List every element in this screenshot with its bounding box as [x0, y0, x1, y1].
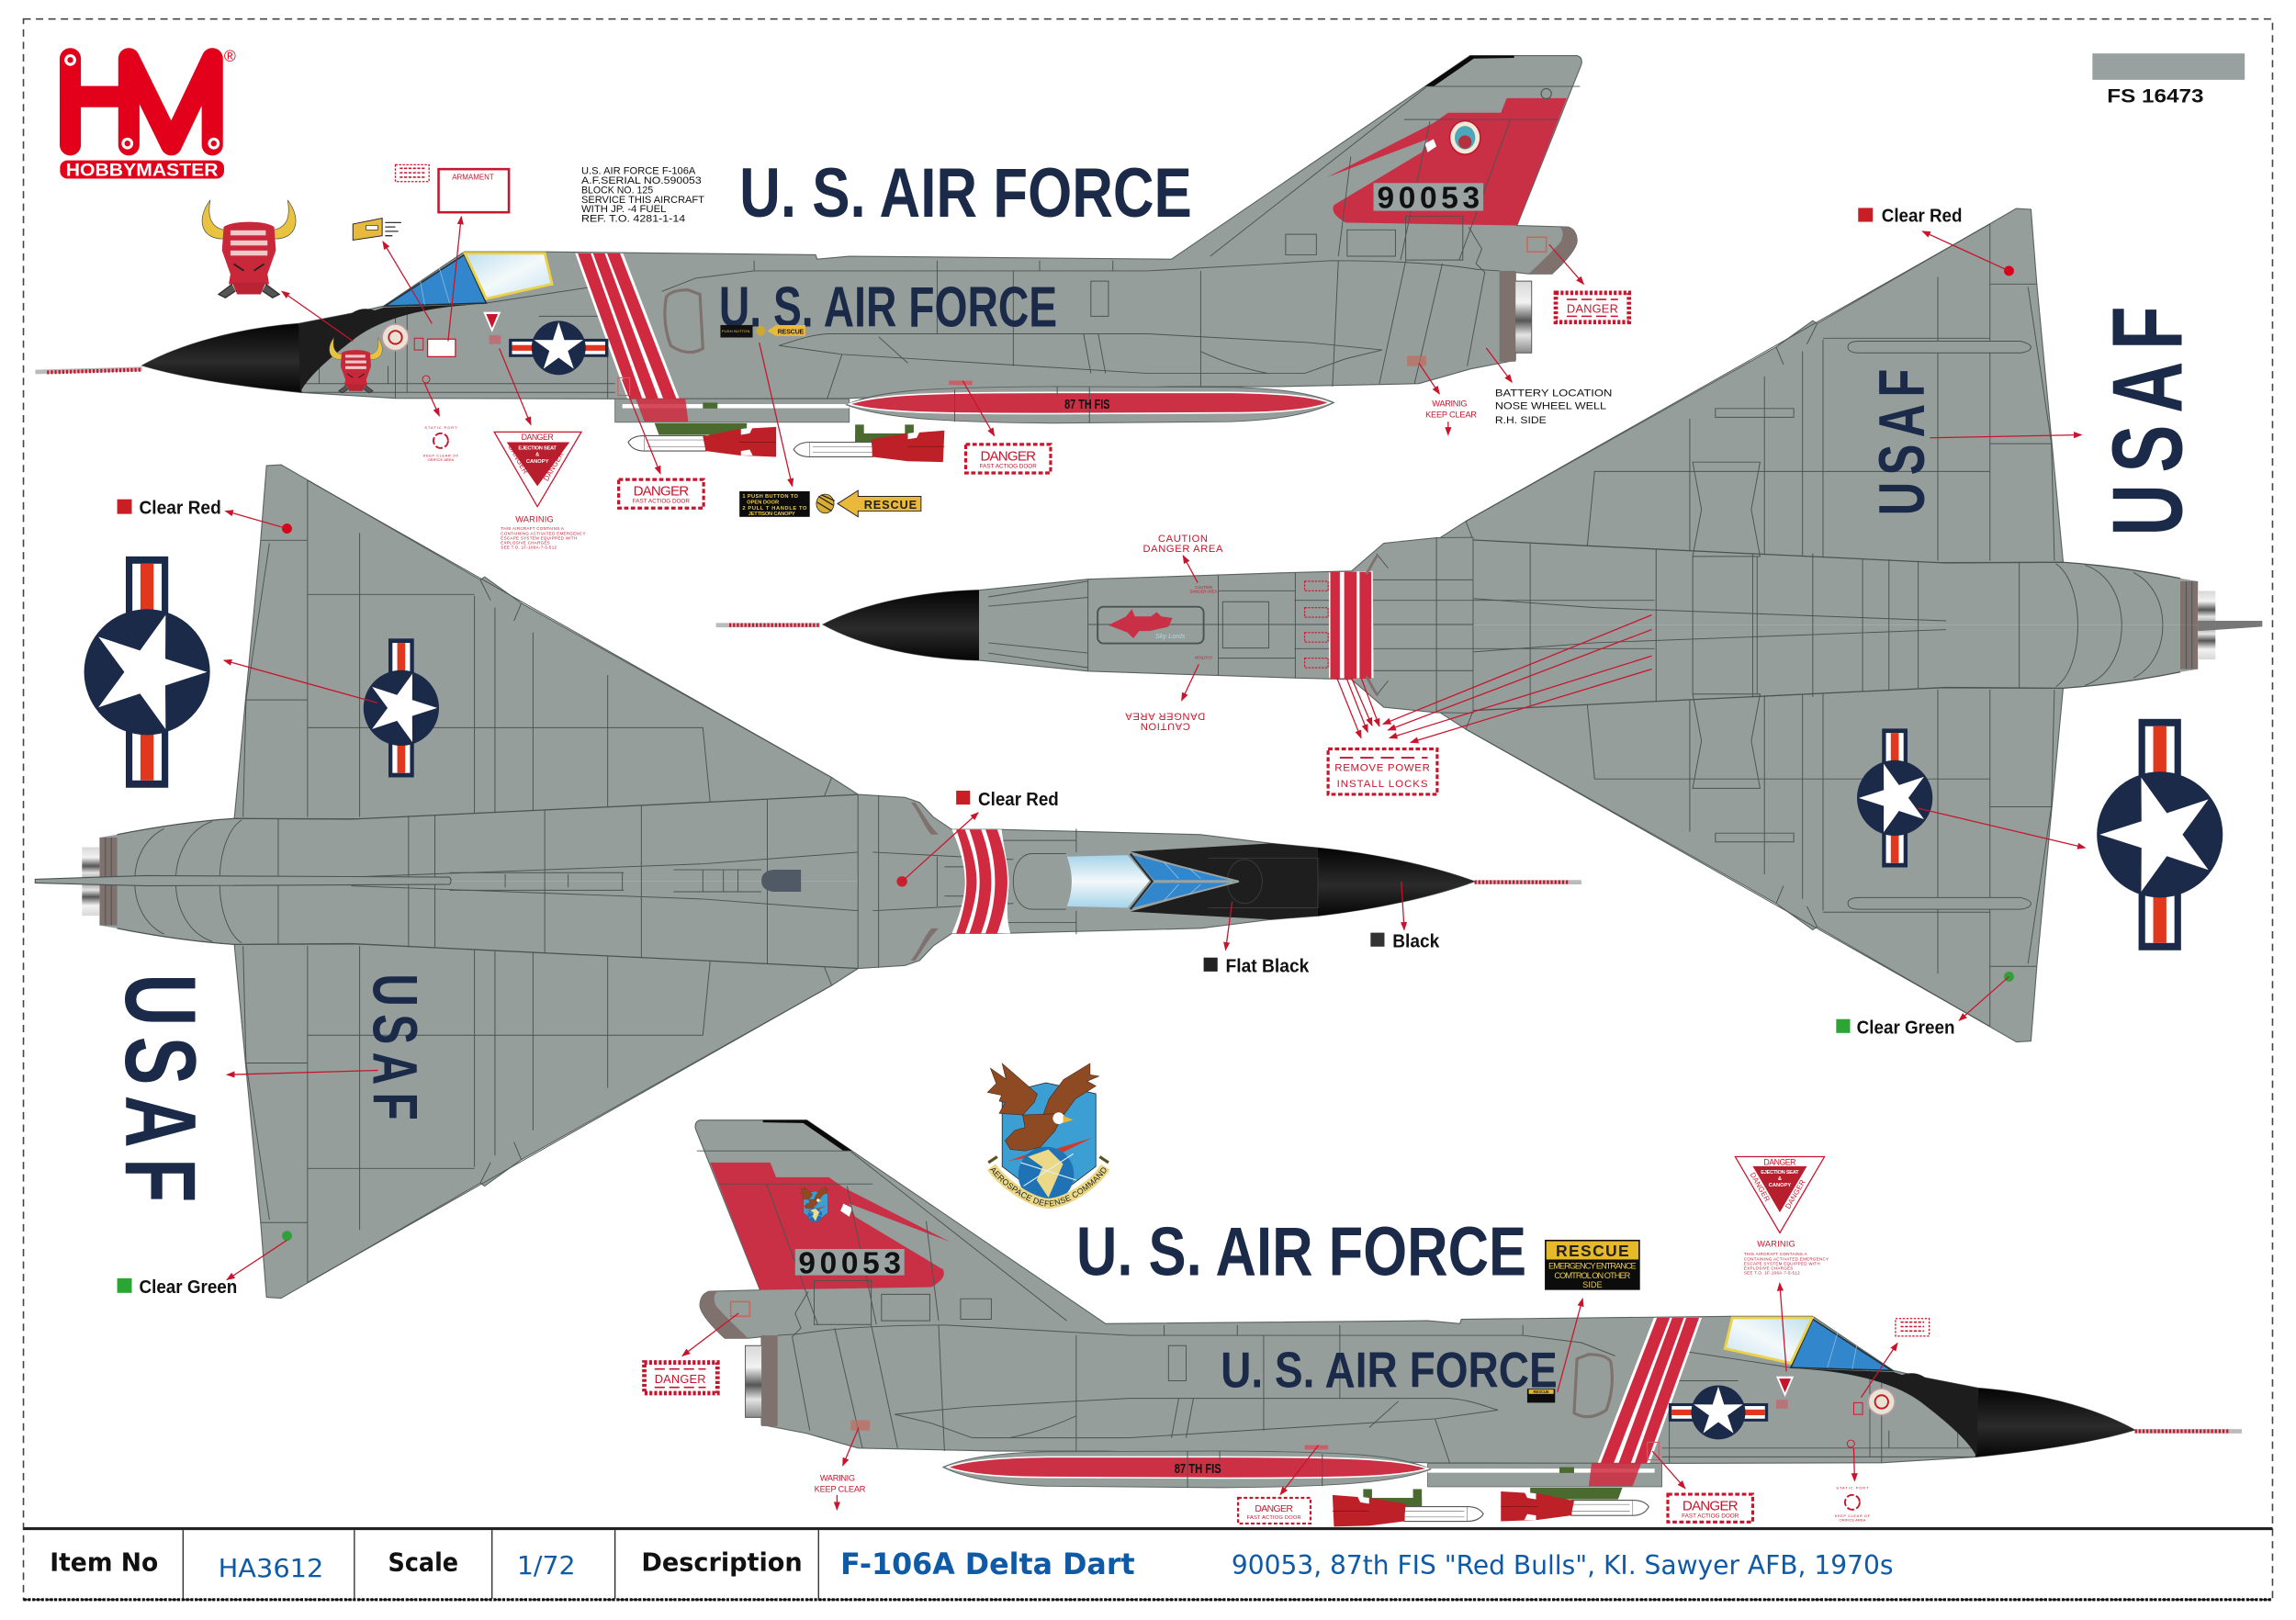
underside view: forward fuselage: Sky Lords [1155, 632, 1186, 640]
legend: clear red mid: Clear Red [978, 790, 1059, 810]
aircraft data block: U.S. AIR FORCE F-106A [581, 166, 696, 177]
underside view leader arrows [1182, 231, 2085, 1020]
danger triangle decal: DANGER [1784, 1178, 1807, 1210]
stencil decal [1896, 1319, 1930, 1336]
canopy jettison panel: 1 PUSH BUTTON TO [742, 494, 798, 500]
fuselage title: U. S. AIR FORCE [1221, 1342, 1558, 1399]
warning keep clear: WARINIG [1432, 399, 1468, 408]
danger fast action door decal 1 [619, 479, 703, 508]
small rescue decal: RESCUE [1533, 1389, 1549, 1394]
rescue panel [1545, 1240, 1640, 1290]
underside roundel small [1857, 728, 1932, 867]
aircraft data block: BLOCK NO. 125 [581, 185, 653, 196]
yellow card decal [353, 219, 401, 240]
rescue arrow decal [838, 490, 921, 517]
small bull emblem [330, 338, 382, 393]
warning fine print: THIS AIRCRAFT CONTAINS A [1744, 1252, 1807, 1256]
bottom aircraft: right side profile [695, 1120, 2135, 1526]
danger triangle decal: DANGER [522, 433, 554, 442]
small armament panel [428, 339, 456, 356]
ADC crest [986, 1063, 1109, 1209]
legend: clear red (underside): Clear Red [1882, 207, 1962, 227]
down arrow [836, 1495, 838, 1510]
underside green light [2004, 972, 2014, 982]
danger triangle decal: DANGER [1763, 1157, 1796, 1166]
nose probe bottom aircraft [2135, 1429, 2242, 1434]
label: scale: Scale [388, 1547, 458, 1578]
danger triangle decal: DANGER [507, 444, 530, 476]
fuselage title: U. S. AIR FORCE [719, 276, 1057, 340]
colour swatch FS 16473: FS 16473 [2107, 85, 2204, 107]
underside view: forward fuselage [716, 341, 2262, 909]
danger triangle decal: DANGER [1749, 1171, 1772, 1203]
danger fast action door decal 4: FAST ACTIOG DOOR [1682, 1513, 1739, 1520]
caution text forward: DANGER AREA [1142, 544, 1223, 555]
danger triangle decal: CANOPY [526, 459, 549, 465]
warning fine print: THIS AIRCRAFT CONTAINS A [501, 526, 564, 531]
table rules [24, 1527, 2272, 1600]
detached roundel large [2097, 719, 2223, 951]
tail serial: 90053 [798, 1246, 901, 1280]
rescue arrow decal: RESCUE [864, 498, 917, 512]
static port decal: KEEP CLEAR OF [1835, 1513, 1871, 1518]
logo: Hobbymaster: ® [224, 47, 236, 65]
underside wing USAF small: USAF [1866, 369, 1938, 515]
static port decal: KEEP CLEAR OF [423, 453, 459, 457]
danger fast action door decal 3: DANGER [1255, 1504, 1293, 1514]
warning keep clear [1425, 399, 1477, 419]
canopy jettison panel: OPEN DOOR [747, 500, 780, 505]
large title: U.S. AIR FORCE: U. S. AIR FORCE [1076, 1213, 1526, 1290]
planform view: forward fuselage [858, 794, 1475, 969]
rescue panel: SIDE [1582, 1280, 1603, 1289]
planform probe [1475, 880, 1581, 884]
warning fine print: WARINIG [515, 514, 554, 523]
detached USAF large: USAF [2092, 306, 2204, 536]
planform view leader arrows [224, 511, 1404, 1279]
danger fast action door decal 2: DANGER [980, 448, 1036, 464]
top view leader arrows [282, 217, 1583, 486]
static port decal [1835, 1485, 1871, 1523]
danger fast action door decal 3 [1238, 1498, 1311, 1524]
legend: black [1370, 932, 1440, 952]
hatched circle [816, 494, 835, 513]
remove power decal: REMOVE POWER [1334, 762, 1430, 773]
value: scale: 1/72 [517, 1550, 576, 1581]
static port decal [423, 425, 459, 462]
battery location note: BATTERY LOCATION [1495, 388, 1612, 399]
warning fine print: SEE T.O. 1F-106A-7-5-512 [1744, 1271, 1800, 1276]
static port decal: ORIFICE AREA [1840, 1518, 1866, 1523]
planform red light [282, 523, 292, 534]
large bull emblem [202, 200, 296, 298]
tail serial: 90053 [1378, 181, 1480, 215]
remove power decal [1328, 749, 1437, 794]
canopy jettison panel [739, 491, 810, 517]
underside view: wings [1439, 208, 2063, 1042]
warning fine print: SEE T.O. 1F-106A-7-5-512 [501, 546, 557, 550]
small rescue decal [720, 325, 805, 338]
caution text inverted: DANGER AREA [1125, 710, 1205, 721]
aircraft data block [581, 166, 704, 225]
caution text forward: CAUTION [1158, 534, 1209, 545]
tail danger decal: DANGER [1567, 301, 1618, 315]
danger triangle decal: EJECTION SEAT [518, 445, 557, 451]
battery location note: R.H. SIDE [1495, 415, 1547, 426]
tail ADC crest small [800, 1187, 828, 1222]
danger triangle decal: & [535, 453, 539, 458]
warning fine print [1744, 1240, 1829, 1276]
danger fast action door decal 1: FAST ACTIOG DOOR [633, 499, 690, 505]
warning keep clear [815, 1474, 866, 1494]
tiny caution decals: CAUTION [1195, 655, 1212, 659]
legend: clear green: Clear Green [139, 1277, 237, 1298]
warning fine print: EXPLOSIVE CHARGES [501, 540, 550, 545]
battery location note [1495, 388, 1612, 426]
label: description: Description [641, 1547, 803, 1578]
danger fast action door decal 1: DANGER [634, 484, 689, 500]
rescue panel: RESCUE [1556, 1242, 1629, 1260]
planform green light [282, 1231, 292, 1241]
caution text inverted: CAUTION [1140, 721, 1190, 732]
87th FIS tank label: 87 TH FIS [1064, 397, 1110, 412]
tiny caution decals [1190, 585, 1218, 659]
warning keep clear: KEEP CLEAR [815, 1485, 866, 1494]
legend: clear red: Clear Red [139, 499, 221, 519]
danger triangle decal: CANOPY [1769, 1183, 1791, 1188]
rescue panel: EMERGENCY ENTRANCE [1548, 1262, 1637, 1271]
warning fine print: EXPLOSIVE CHARGES [1744, 1266, 1794, 1270]
tail danger decal [1556, 293, 1629, 322]
value: description: 90053, 87th FIS "Red Bulls", KI. Sawyer AFB, 1970s [1232, 1549, 1894, 1581]
intake vent [761, 870, 801, 892]
legend: black: Black [1392, 932, 1440, 952]
top aircraft: left side profile [142, 56, 1581, 462]
ADC crest: AEROSPACE DEFENSE COMMAND [990, 1167, 1106, 1207]
static port decal: STATIC PORT [424, 425, 457, 430]
aircraft data block: WITH JP. -4 FUEL [581, 204, 666, 215]
aircraft data block: REF. T.O. 4281-1-14 [581, 214, 685, 225]
static port decal: STATIC PORT [1836, 1485, 1869, 1490]
caution text forward [1142, 534, 1223, 555]
logo: Hobbymaster [60, 47, 236, 180]
down arrow [1447, 422, 1449, 435]
danger triangle decal [494, 432, 581, 507]
underside red light [2004, 266, 2014, 276]
warning fine print: CONTAINING ACTIVATED EMERGENCY [1744, 1256, 1829, 1261]
label: item no: Item No [50, 1547, 158, 1578]
armament decal: ARMAMENT [452, 173, 494, 181]
tiny caution decals: DANGER AREA [1190, 590, 1218, 594]
logo: Hobbymaster: HOBBYMASTER [66, 161, 219, 180]
value: model name: F-106A Delta Dart [840, 1547, 1135, 1581]
small rescue decal [1527, 1389, 1555, 1402]
small rescue decal: PUSH BUTTON [722, 329, 749, 333]
danger triangle decal: DANGER [542, 450, 566, 483]
detached roundel [84, 557, 210, 788]
danger triangle decal: EJECTION SEAT [1761, 1170, 1799, 1176]
warning keep clear: WARINIG [820, 1474, 855, 1483]
87th FIS tank label: 87 TH FIS [1175, 1461, 1221, 1477]
armament decal [439, 169, 509, 212]
nose probe top aircraft [35, 366, 142, 374]
danger triangle decal [1735, 1157, 1825, 1232]
planform view: wings [234, 465, 858, 1299]
legend: clear green (underside): Clear Green [1857, 1018, 1954, 1039]
danger fast action door decal 3: FAST ACTIOG DOOR [1247, 1515, 1301, 1521]
battery location note: NOSE WHEEL WELL [1495, 401, 1606, 412]
warning fine print [501, 514, 586, 550]
remove power decal: INSTALL LOCKS [1337, 779, 1428, 790]
underside view: rear fuselage [1439, 538, 2215, 712]
warning fine print: CONTAINING ACTIVATED EMERGENCY [501, 531, 586, 535]
canopy jettison panel: 2 PULL T HANDLE TO [742, 506, 807, 512]
small rescue decal: RESCUE [778, 329, 805, 336]
wing USAF: USAF [360, 973, 431, 1120]
red light fuselage [896, 876, 907, 887]
danger fast action door decal 2 [966, 444, 1051, 473]
danger triangle decal: & [1778, 1176, 1782, 1182]
large title: U.S. AIR FORCE: U. S. AIR FORCE [739, 154, 1192, 232]
static port decal: ORIFICE AREA [428, 457, 455, 462]
warning keep clear: KEEP CLEAR [1425, 410, 1477, 419]
caution text inverted [1125, 710, 1205, 732]
warning fine print: ESCAPE SYSTEM EQUIPPED WITH [1744, 1261, 1820, 1266]
colour swatch FS 16473 [2092, 53, 2245, 107]
danger fast action door decal 4: DANGER [1683, 1499, 1739, 1514]
danger fast action door decal 4 [1668, 1494, 1752, 1522]
planform view: rear fuselage [82, 794, 858, 969]
rescue panel: COMTROL ON OTHER [1554, 1271, 1631, 1280]
stencil decal [395, 164, 429, 182]
tail danger decal: DANGER [655, 1372, 706, 1386]
planform dorsal fin [35, 875, 451, 886]
bottom view leader arrows [682, 1283, 1897, 1494]
wing roundel [364, 638, 439, 777]
fin ring marker [1541, 88, 1551, 99]
warning fine print: ESCAPE SYSTEM EQUIPPED WITH [501, 535, 577, 540]
value: item no: HA3612 [219, 1553, 323, 1583]
danger fast action door decal 2: FAST ACTIOG DOOR [980, 463, 1037, 469]
fuselage spine panel lines [449, 870, 761, 892]
legend: flat black: Flat Black [1226, 957, 1310, 977]
detached USAF: USAF [104, 973, 217, 1202]
tail emblem [1449, 121, 1480, 154]
canopy jettison panel: JETTISON CANOPY [748, 512, 795, 517]
tiny caution decals: CAUTION [1195, 585, 1212, 590]
tail danger decal [645, 1363, 717, 1393]
warning fine print: WARINIG [1757, 1240, 1795, 1249]
aircraft data block: SERVICE THIS AIRCRAFT [581, 195, 704, 206]
aircraft data block: A.F.SERIAL NO.590053 [581, 175, 702, 186]
